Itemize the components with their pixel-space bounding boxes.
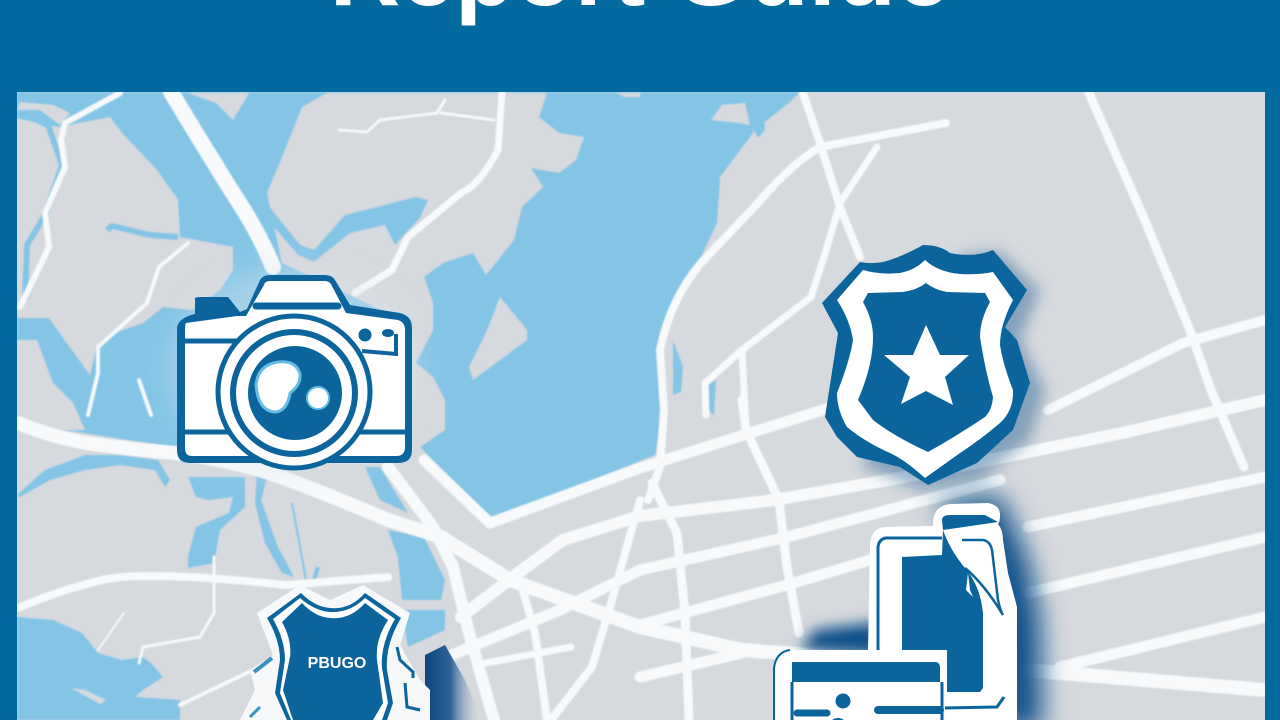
camera soft glow [170,265,420,475]
land: top patches [188,93,640,120]
land: northwest corner [17,102,70,125]
badge accent strokes [250,647,420,717]
shield shadow [860,252,1045,490]
header band [0,0,1280,92]
island [469,297,527,380]
land: west [17,117,233,375]
water: southwest bay [17,617,180,720]
badge label: PBUGO [308,655,366,672]
payment card [774,650,945,720]
icon: police badge [240,585,482,720]
water: bay and channels [17,92,800,522]
icon: star shield [822,245,1045,490]
badge dark shadow [425,645,475,720]
phone shadow [935,495,1042,720]
card shadow [800,622,880,655]
land: southwest shore [17,340,85,430]
land: bay sliver [71,688,106,704]
water: east inlets [673,103,765,415]
water: river [365,467,445,647]
land: central peninsula [267,93,584,447]
water: southwest channel [17,455,170,497]
water: inlet channel [268,197,428,262]
minor roads [20,93,502,705]
water and land [17,92,800,720]
land: north shore patch [711,103,750,125]
phone body [868,503,1017,720]
icon: phone and card [774,495,1042,720]
water: pond [188,477,245,568]
water: thin channels [20,112,318,580]
water: stream [255,470,294,577]
icon: camera [170,265,420,475]
